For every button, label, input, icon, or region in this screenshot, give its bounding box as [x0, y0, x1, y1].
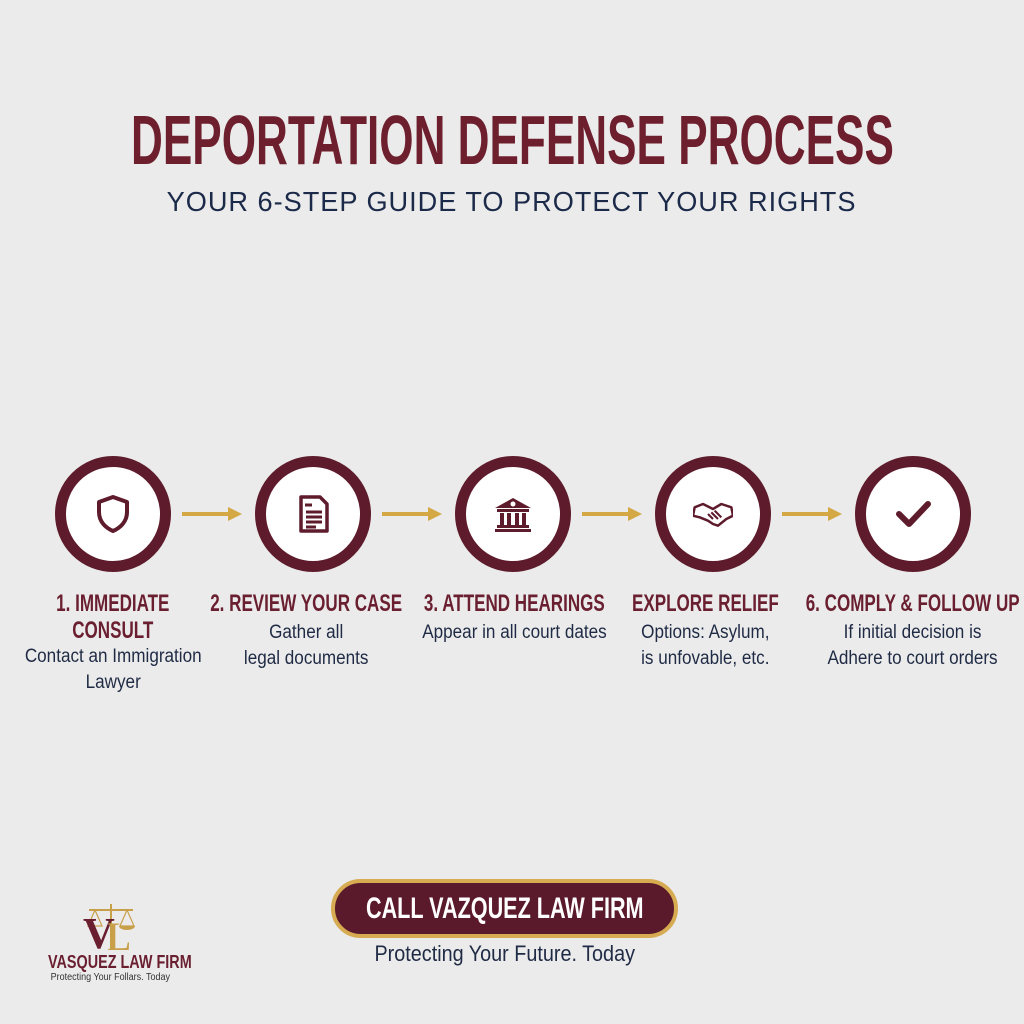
tagline: Protecting Your Future. Today [374, 941, 635, 966]
arrow 2 [382, 507, 442, 521]
step 1 text [25, 590, 201, 693]
logo name: VASQUEZ LAW FIRM [48, 952, 192, 972]
body 4: is unfovable, etc. [641, 648, 769, 669]
step 4 text [632, 590, 778, 669]
title: DEPORTATION DEFENSE PROCESS [131, 101, 893, 179]
body 5: If initial decision is [844, 622, 982, 643]
body 4 [641, 622, 769, 669]
body 5: Adhere to court orders [828, 648, 998, 669]
body 1: Lawyer [85, 672, 141, 693]
heading 5: 6. COMPLY & FOLLOW UP [806, 590, 1020, 617]
heading 4: EXPLORE RELIEF [632, 590, 778, 617]
subtitle: YOUR 6-STEP GUIDE TO PROTECT YOUR RIGHTS [167, 186, 857, 217]
step 4 circle: handshake [655, 456, 771, 572]
body 5 [828, 622, 998, 669]
step 5 text [806, 590, 1020, 669]
step 1 circle: shield [55, 456, 171, 572]
step 3 text [422, 590, 606, 643]
logo [48, 904, 192, 983]
arrow 3 [582, 507, 642, 521]
body 3: Appear in all court dates [422, 622, 606, 643]
body 1: Contact an Immigration [25, 646, 201, 667]
step 2 circle: document [255, 456, 371, 572]
heading 2: 2. REVIEW YOUR CASE [210, 590, 402, 617]
call button [331, 879, 678, 938]
heading 3: 3. ATTEND HEARINGS [424, 590, 604, 617]
heading 1 [56, 590, 170, 644]
button text: CALL VAZQUEZ LAW FIRM [366, 892, 644, 925]
body 2 [244, 622, 368, 669]
heading 1: 1. IMMEDIATE [56, 590, 170, 617]
body 4: Options: Asylum, [641, 622, 769, 643]
step 3 circle: courthouse [455, 456, 571, 572]
body 2: legal documents [244, 648, 368, 669]
logo tagline: Protecting Your Follars. Today [50, 972, 170, 983]
heading 1: CONSULT [72, 617, 154, 644]
step 5 circle: check [855, 456, 971, 572]
arrow 1 [182, 507, 242, 521]
body 2: Gather all [269, 622, 343, 643]
arrow 4 [782, 507, 842, 521]
icon: scales monogram [83, 904, 135, 954]
body 1 [25, 646, 201, 693]
step 2 text [210, 590, 402, 669]
